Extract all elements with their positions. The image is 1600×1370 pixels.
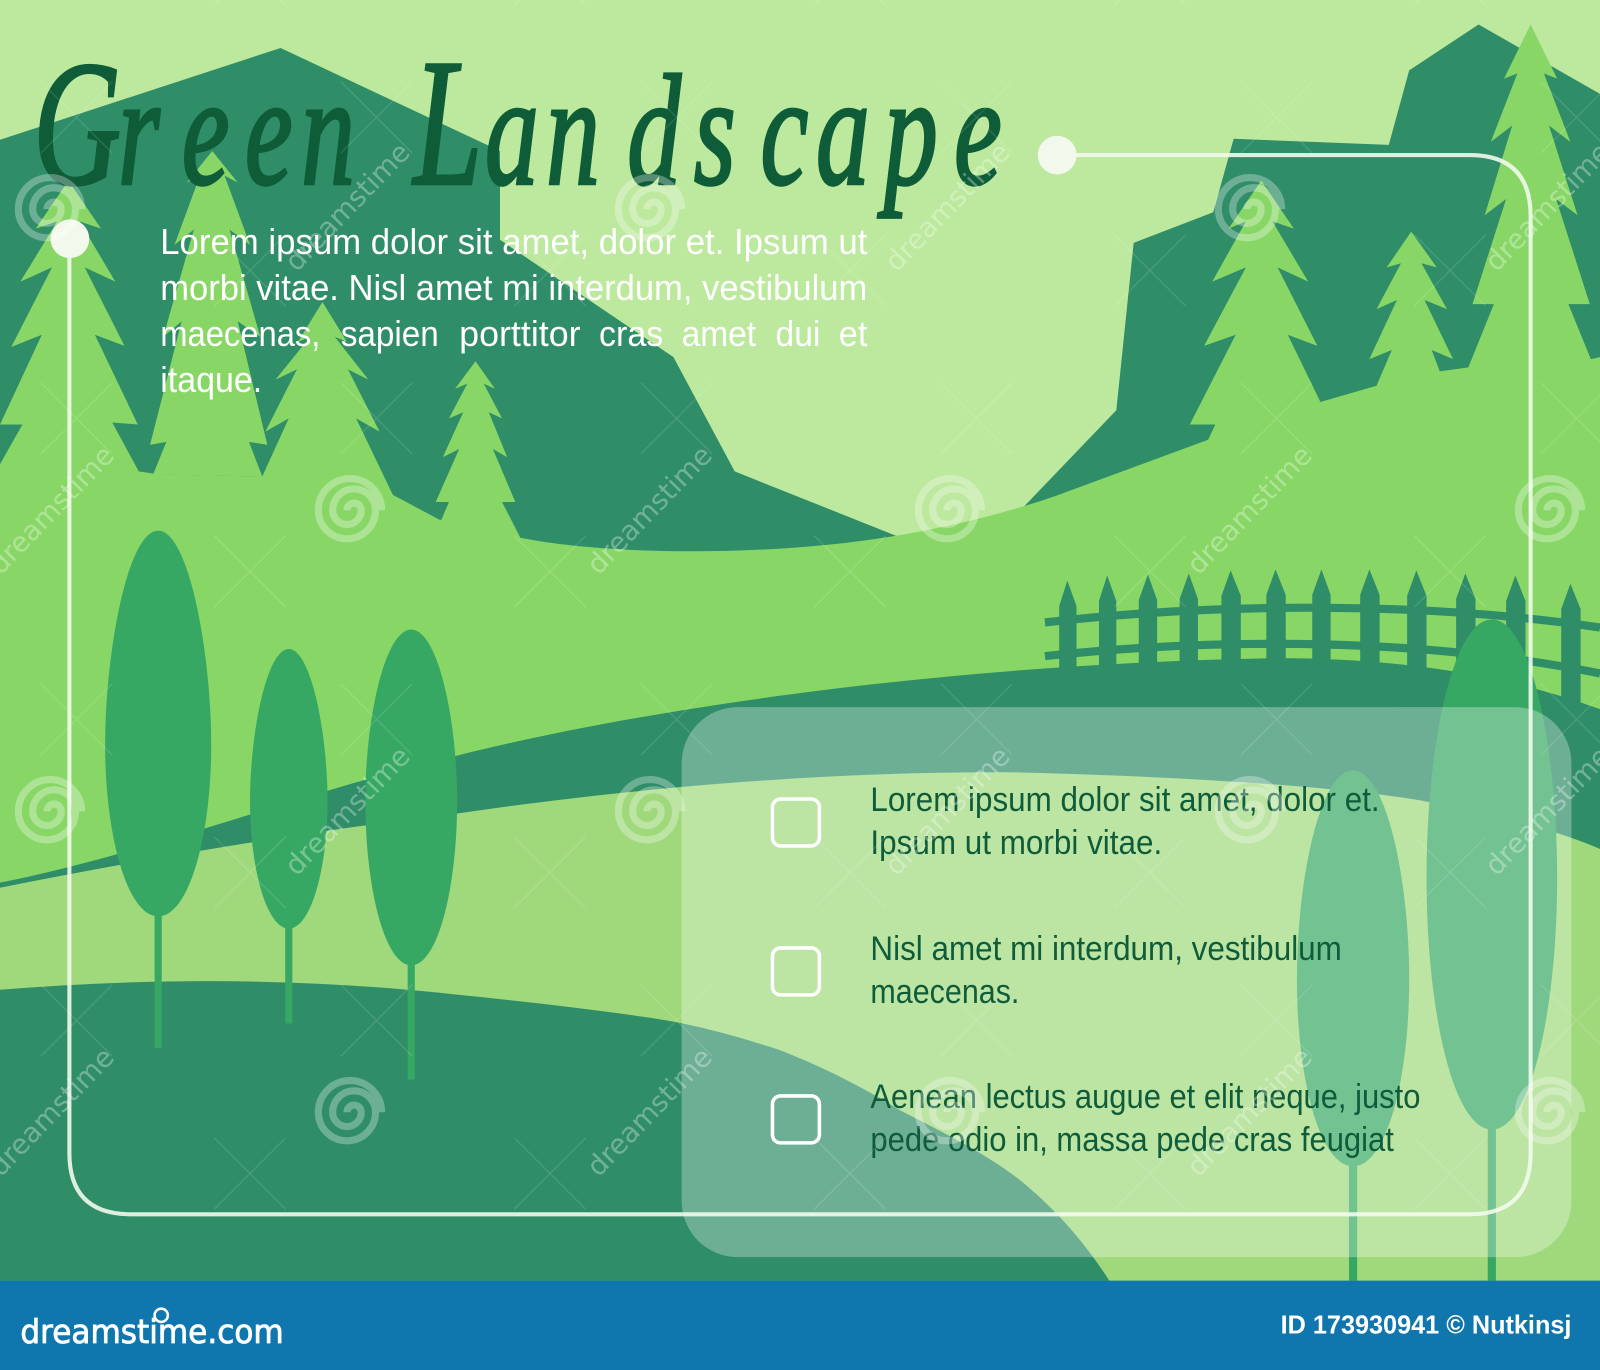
title: e xyxy=(182,43,230,219)
title: a xyxy=(485,43,539,219)
title: r xyxy=(118,43,161,219)
watermark overlay: dreamstime xyxy=(1181,1041,1319,1183)
watermark overlay: dreamstime xyxy=(581,439,719,581)
main green hill xyxy=(0,357,1600,1020)
checklist item 3: Aenean lectus augue et elit neque, justo xyxy=(870,1078,1420,1116)
checklist item 2 xyxy=(772,930,1342,1011)
cypress trees right xyxy=(1297,619,1557,1281)
checklist item 1: Lorem ipsum dolor sit amet, dolor et. xyxy=(870,781,1380,819)
right pine trees xyxy=(1190,24,1591,449)
title: s xyxy=(694,43,736,219)
dark green foreground hill xyxy=(0,981,1109,1281)
title: p xyxy=(878,43,938,219)
fence xyxy=(1045,569,1600,704)
left pine trees xyxy=(0,151,520,538)
title: L xyxy=(412,22,482,223)
cypress trees left xyxy=(105,531,457,1080)
checklist item 3: pede odio in, massa pede cras feugiat xyxy=(870,1121,1394,1159)
title: e xyxy=(245,43,293,219)
watermark overlay: dreamstime xyxy=(879,740,1017,882)
title: a xyxy=(816,43,870,219)
checklist item 1 xyxy=(772,781,1380,862)
intro paragraph: amet xyxy=(682,314,756,354)
intro paragraph: et xyxy=(839,314,867,354)
intro paragraph xyxy=(160,222,867,400)
right mountain xyxy=(1021,24,1600,612)
footer bar: ID 173930941 © Nutkinsj xyxy=(1281,1312,1571,1340)
checklist item 2: maecenas. xyxy=(870,973,1019,1011)
title: c xyxy=(760,43,808,219)
light green mid hill xyxy=(0,772,1600,1281)
watermark overlay: dreamstime xyxy=(279,136,417,278)
left mountain xyxy=(0,48,896,612)
footer bar xyxy=(0,1281,1600,1370)
intro paragraph: Lorem ipsum dolor sit amet, dolor et. Ipsum ut xyxy=(160,222,867,262)
checklist item 1: Ipsum ut morbi vitae. xyxy=(870,824,1162,862)
title: G xyxy=(33,26,121,223)
white frame line with dots xyxy=(51,136,1531,1214)
intro paragraph: morbi vitae. Nisl amet mi interdum, vestibulum xyxy=(160,268,867,308)
intro paragraph: dui xyxy=(776,314,820,354)
translucent list panel xyxy=(682,707,1571,1257)
checklist item 2: Nisl amet mi interdum, vestibulum xyxy=(870,930,1342,968)
title: d xyxy=(627,43,681,219)
title: n xyxy=(301,43,355,219)
checklist item 3 xyxy=(772,1078,1420,1159)
title: n xyxy=(546,43,600,219)
watermark overlay: dreamstime xyxy=(581,1041,719,1183)
footer bar: dreamstime.com xyxy=(20,1313,284,1351)
intro paragraph: itaque. xyxy=(160,360,262,400)
watermark overlay: dreamstime xyxy=(879,136,1017,278)
intro paragraph: cras xyxy=(599,314,663,354)
watermark overlay: dreamstime xyxy=(279,740,417,882)
title: e xyxy=(954,43,1002,219)
intro paragraph: sapien xyxy=(341,314,439,354)
intro paragraph: porttitor xyxy=(459,314,581,354)
watermark overlay: dreamstime xyxy=(1181,439,1319,581)
dark green band hill xyxy=(0,658,1600,1020)
intro paragraph: maecenas, xyxy=(160,314,320,354)
